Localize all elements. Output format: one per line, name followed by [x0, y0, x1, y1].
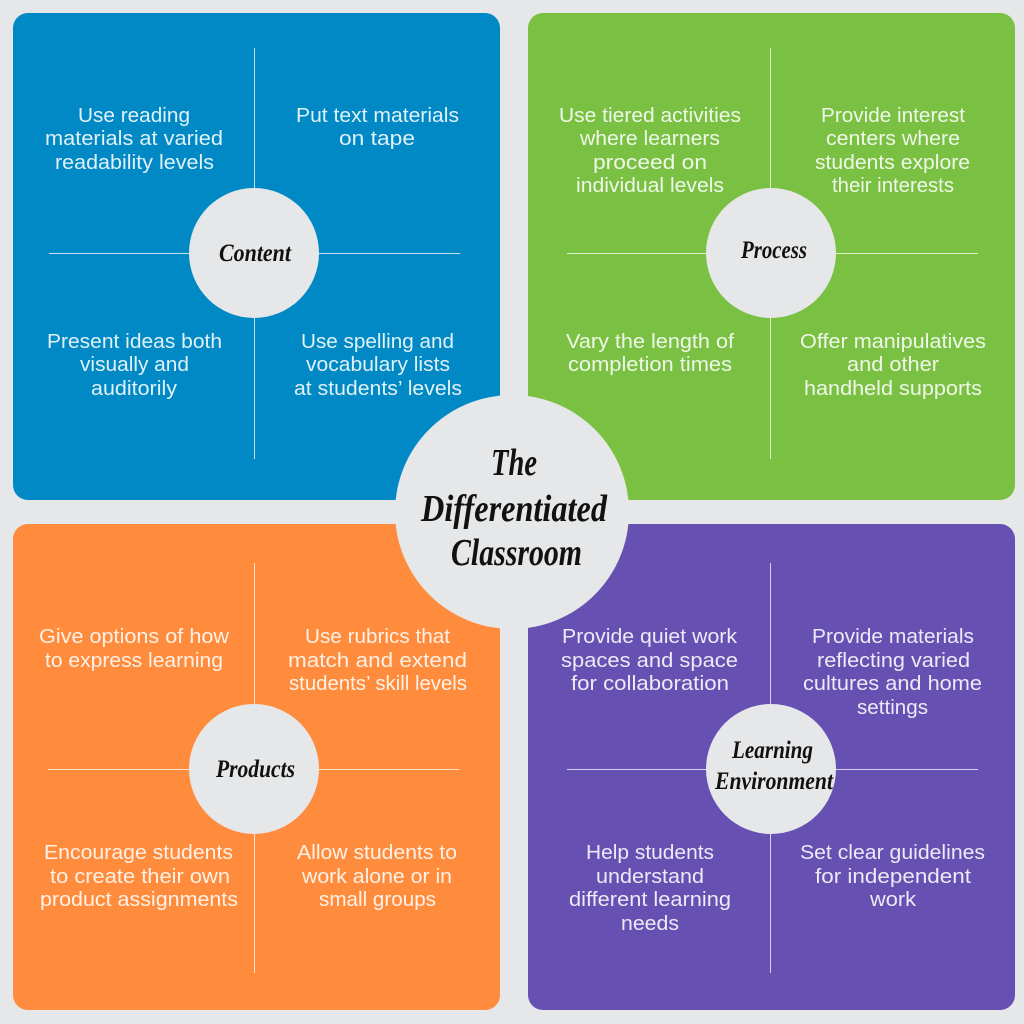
text: learning needs: different learning: [569, 888, 731, 911]
text: manipulatives: [800, 330, 986, 400]
text: product assignments: product assignments: [40, 888, 238, 911]
text: varied cultures: reflecting varied: [817, 649, 970, 672]
text: interest centers: their interests: [832, 174, 954, 197]
text: spelling lists: [294, 330, 462, 400]
center circle: the differentiated classroom title: Differentiated: [420, 488, 608, 530]
text: manipulatives: and other: [847, 353, 939, 376]
text: rubrics: [288, 625, 467, 695]
text: present ideas: auditorily: [91, 377, 178, 400]
text: manipulatives: handheld supports: [804, 377, 982, 400]
text: product assignments: Encourage students: [44, 841, 233, 864]
text: reading materials: Use reading: [78, 104, 190, 127]
text: completion times: [566, 330, 734, 376]
text: learning needs: understand: [596, 865, 704, 888]
panel background: green: [528, 13, 1015, 500]
badge: process: Process: [740, 237, 807, 264]
text: tiered activities: individual levels: [576, 174, 724, 197]
text: present ideas: Present ideas both: [47, 330, 222, 353]
text: product assignments: [40, 841, 238, 911]
text: work alone or in groups: small groups: [319, 888, 436, 911]
text: work spaces: Provide quiet work: [562, 625, 738, 648]
text: spelling lists: at students’ levels: [294, 377, 462, 400]
badge: products: [189, 704, 319, 834]
text: tiered activities: proceed on: [593, 151, 707, 174]
text: text on tape: on tape: [339, 127, 415, 150]
text: spelling lists: Use spelling and: [301, 330, 454, 353]
text: reading materials: [45, 104, 223, 174]
text: work alone or in groups: work alone or in: [301, 865, 452, 888]
text: completion times: Vary the length of: [566, 330, 734, 353]
text: guidelines: [800, 841, 985, 911]
text: tiered activities: [559, 104, 741, 197]
text: text on tape: [296, 104, 459, 150]
text: text on tape: Put text materials: [296, 104, 459, 127]
panel: content: [13, 13, 500, 500]
badge: content: Content: [219, 240, 292, 267]
text: rubrics: Use rubrics that: [305, 625, 450, 648]
text: rubrics: match and extend: [288, 649, 467, 672]
badge: learning environment: Learning: [731, 737, 813, 764]
text: interest centers: Provide interest: [821, 104, 965, 127]
text: learning needs: [569, 841, 731, 935]
badge: process: [706, 188, 836, 318]
text: present ideas: [47, 330, 222, 400]
text: reading materials: readability levels: [55, 151, 214, 174]
text: present ideas: visually and: [80, 353, 189, 376]
text: options: Give options of how: [39, 625, 229, 648]
badge: learning environment: [706, 704, 836, 834]
text: options: to express learning: [45, 649, 223, 672]
panel background: purple: [528, 524, 1015, 1010]
text: tiered activities: where learners: [579, 127, 720, 150]
text: guidelines: work: [869, 888, 917, 911]
text: interest centers: centers where: [826, 127, 960, 150]
text: work spaces: spaces and space: [561, 649, 738, 672]
text: spelling lists: vocabulary lists: [306, 353, 450, 376]
center circle: the differentiated classroom title: [395, 395, 629, 629]
panel: process: [528, 13, 1015, 500]
text: varied cultures: Provide materials: [812, 625, 974, 648]
text: varied cultures: [803, 625, 982, 719]
text: rubrics: students’ skill levels: [289, 672, 467, 695]
text: guidelines: Set clear guidelines: [800, 841, 985, 864]
text: completion times: completion times: [568, 353, 732, 376]
text: reading materials: materials at varied: [45, 127, 223, 150]
panel: products: [13, 524, 500, 1010]
text: varied cultures: cultures and home: [803, 672, 982, 695]
panel: learning environment: [528, 524, 1015, 1010]
text: work alone or in groups: [297, 841, 457, 911]
text: interest centers: [815, 104, 970, 197]
text: work spaces: [561, 625, 738, 695]
text: learning needs: Help students: [586, 841, 714, 864]
badge: content: [189, 188, 319, 318]
text: product assignments: to create their own: [50, 865, 230, 888]
text: learning needs: needs: [621, 912, 679, 935]
center circle: the differentiated classroom title: Classroom: [451, 532, 582, 574]
panel background: orange: [13, 524, 500, 1010]
badge: products: Products: [215, 756, 295, 783]
text: tiered activities: Use tiered activities: [559, 104, 741, 127]
badge: learning environment: Environment: [714, 768, 834, 795]
text: manipulatives: Offer manipulatives: [800, 330, 986, 353]
center circle: the differentiated classroom title: The: [491, 442, 537, 484]
text: options: [39, 625, 229, 672]
text: work spaces: for collaboration: [571, 672, 729, 695]
text: work alone or in groups: Allow students to: [297, 841, 457, 864]
text: varied cultures: settings: [857, 696, 928, 719]
panel background: blue: [13, 13, 500, 500]
text: interest centers: students explore: [815, 151, 970, 174]
text: guidelines: for independent: [815, 865, 971, 888]
